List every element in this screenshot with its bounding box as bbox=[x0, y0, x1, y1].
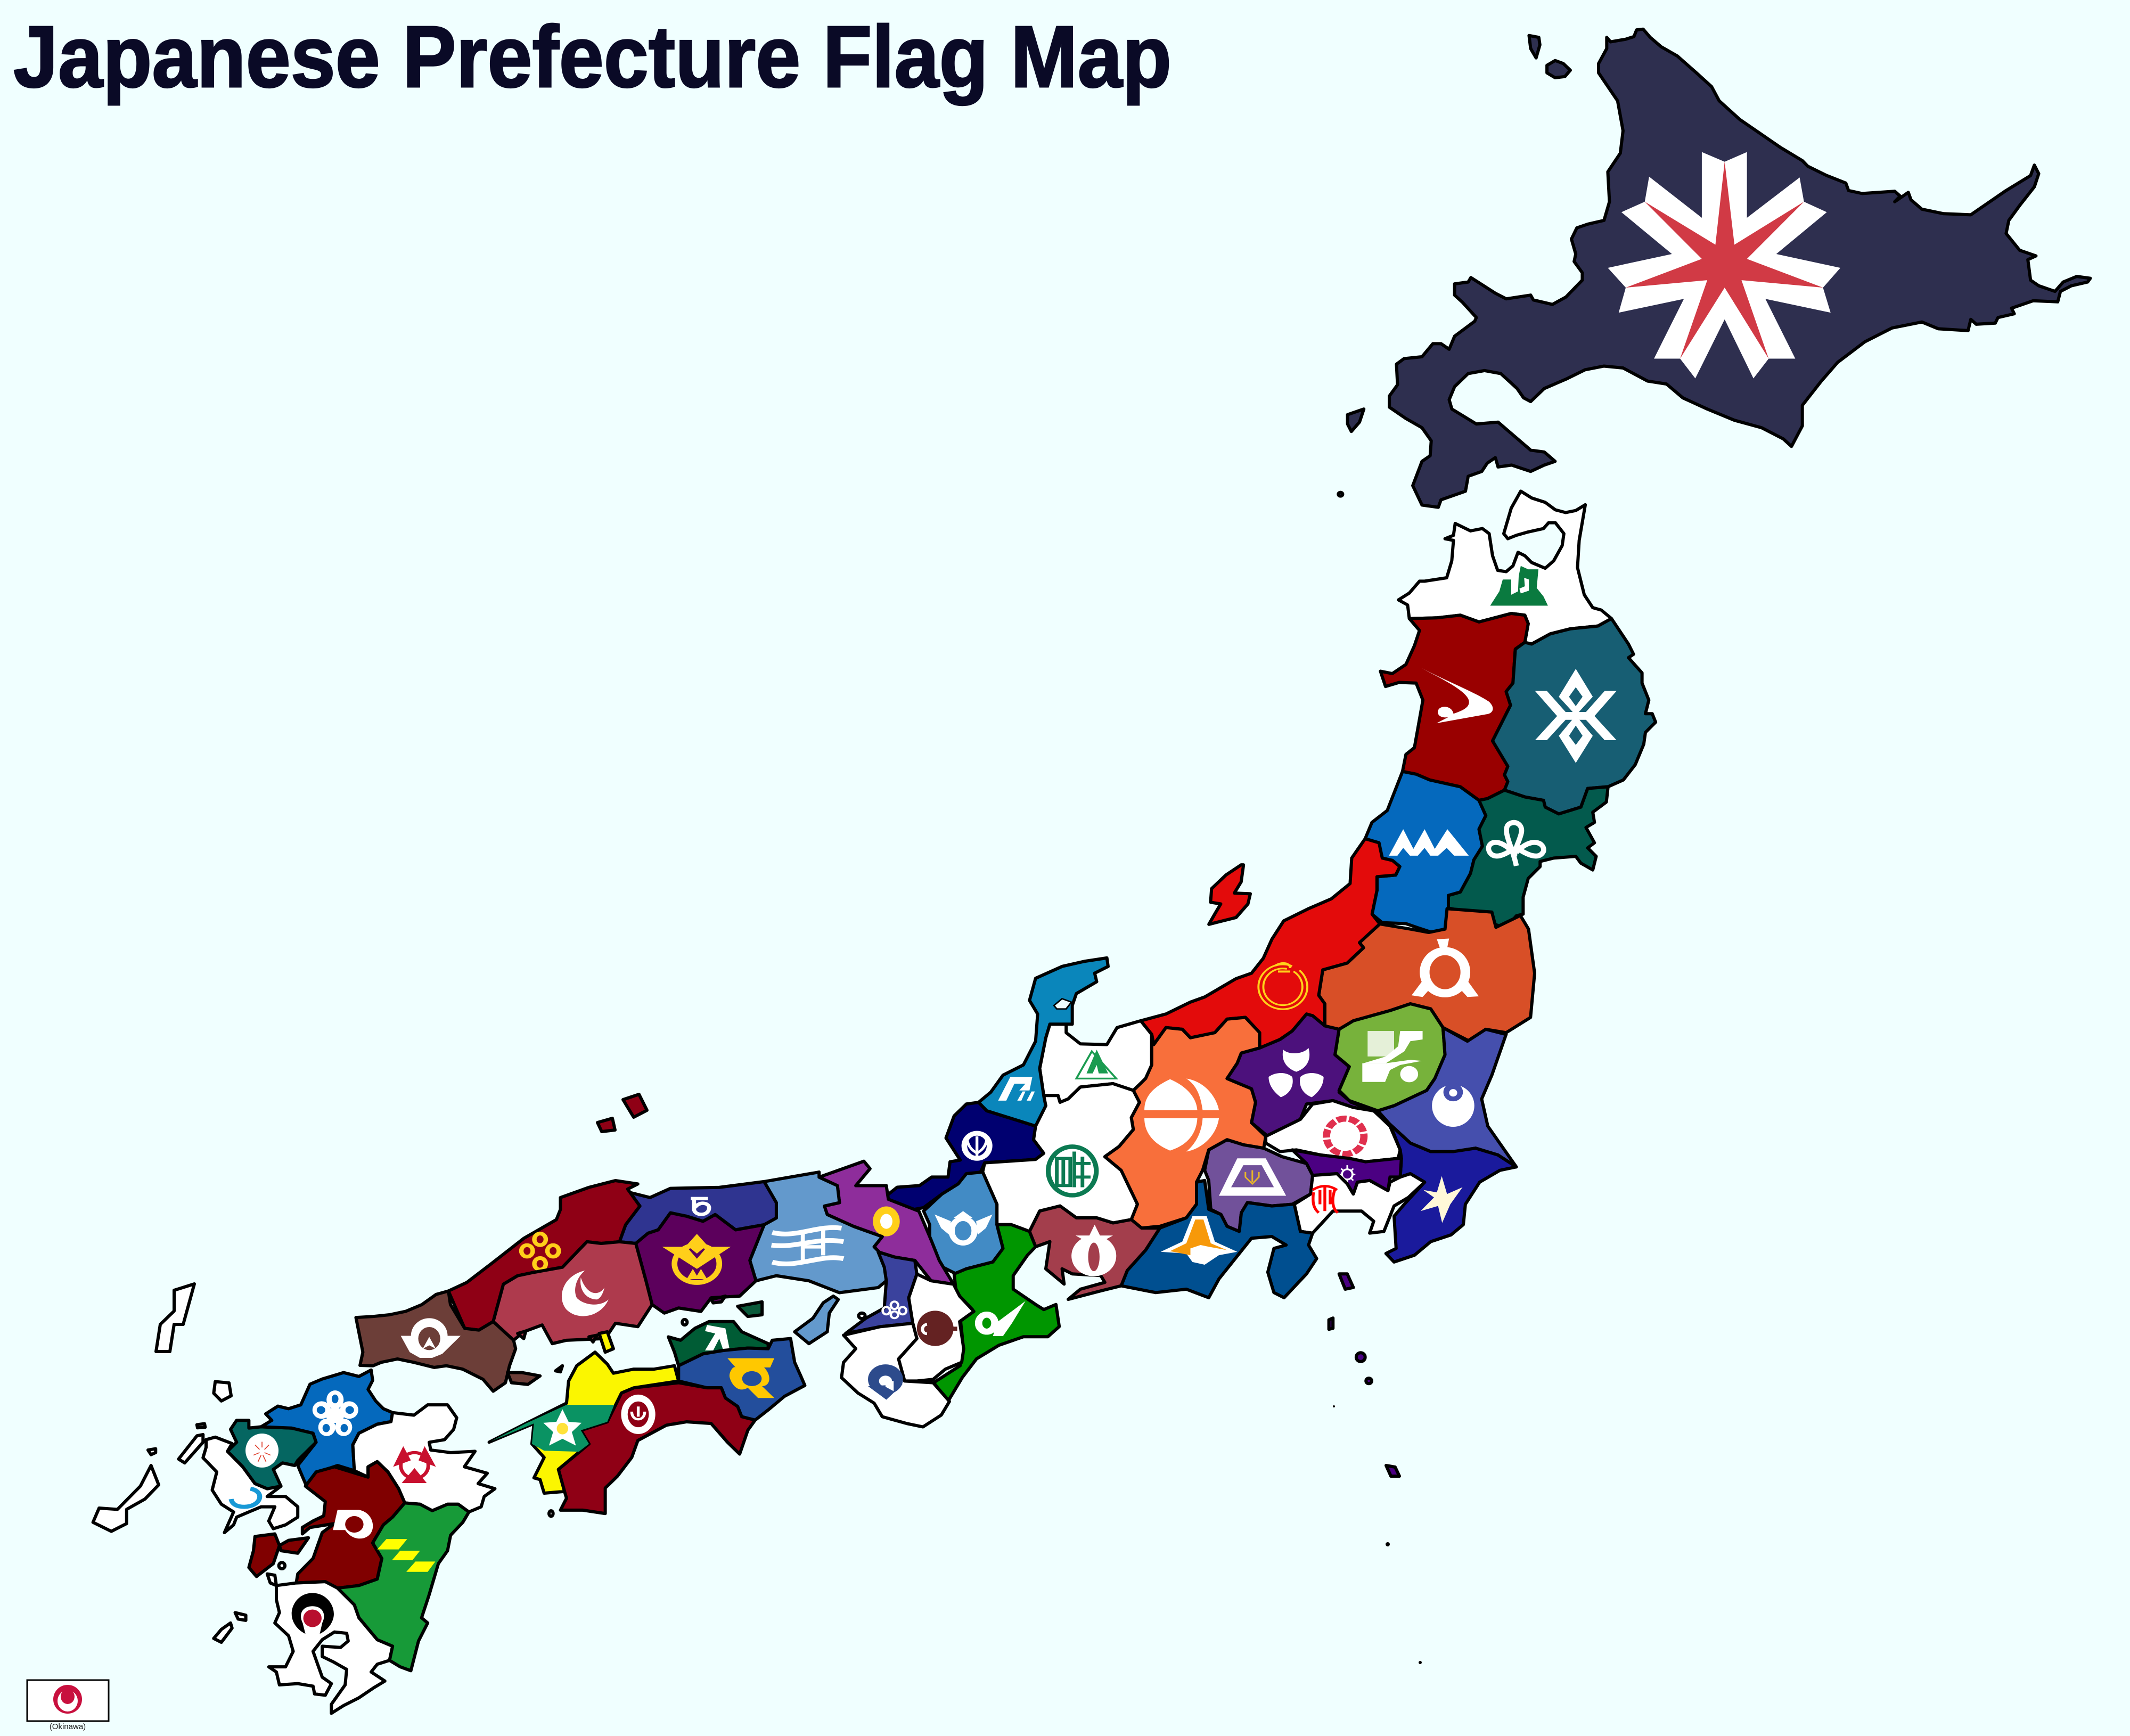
islands: Amakusa bbox=[249, 1534, 308, 1576]
prefecture: Nagano bbox=[1105, 1018, 1266, 1228]
region: Tohoku bbox=[1209, 491, 1656, 933]
prefecture: Fukui and Kyoto coast bbox=[887, 1102, 1044, 1211]
island: Sado bbox=[1209, 865, 1250, 924]
prefecture: Nagasaki bbox=[203, 1437, 298, 1533]
prefecture: Hyogo area bbox=[819, 1161, 954, 1284]
prefecture: Shizuoka bbox=[1121, 1181, 1317, 1298]
prefecture: Kagawa bbox=[668, 1322, 768, 1366]
icon: Okinawa emblem bbox=[53, 1685, 82, 1714]
prefecture: Niigata bbox=[1141, 839, 1400, 1048]
prefecture: Mie bbox=[934, 1225, 1059, 1401]
prefecture: Ehime bbox=[489, 1352, 678, 1493]
prefecture: Yamagata bbox=[1365, 772, 1486, 933]
prefecture: Hyogo south, light blue bbox=[750, 1172, 886, 1293]
prefecture: Okayama bbox=[636, 1213, 764, 1313]
prefecture: Iwate bbox=[1493, 619, 1656, 814]
prefecture: Hokkaido bbox=[1389, 29, 2090, 507]
prefecture: Hiroshima bbox=[493, 1242, 652, 1344]
prefecture: Oita bbox=[353, 1405, 495, 1512]
islands: Oki bbox=[597, 1094, 647, 1132]
prefecture: Akita bbox=[1380, 613, 1528, 800]
region: Kyushu bbox=[93, 1370, 495, 1713]
prefecture: Yamaguchi bbox=[356, 1291, 515, 1391]
prefecture: Shimane bbox=[448, 1181, 640, 1330]
prefecture: Kagoshima bbox=[269, 1582, 392, 1713]
prefecture: Gifu bbox=[982, 1084, 1140, 1231]
prefecture: Gunma bbox=[1227, 1014, 1374, 1136]
prefecture: Chiba bbox=[1386, 1125, 1517, 1262]
prefecture: Yamanashi bbox=[1205, 1140, 1313, 1231]
region: Hokkaido bbox=[1338, 29, 2090, 507]
prefecture: Tokushima bbox=[678, 1339, 805, 1420]
prefecture: Aomori bbox=[1398, 491, 1611, 644]
prefecture: Nara bbox=[898, 1274, 974, 1381]
islands: Rishiri, Rebun, Okushiri bbox=[1338, 36, 1570, 496]
prefecture: Kochi bbox=[559, 1383, 755, 1513]
prefecture: Saga bbox=[227, 1420, 316, 1489]
island: Awaji bbox=[794, 1296, 838, 1344]
prefecture: Ishikawa bbox=[979, 958, 1108, 1126]
inset: Okinawa flag bbox=[27, 1680, 109, 1731]
islands: Seto Inland Sea bbox=[507, 1296, 865, 1516]
title: Japanese Prefecture Flag Map bbox=[13, 8, 1172, 105]
prefecture: Osaka bbox=[846, 1252, 917, 1333]
prefecture: Tottori bbox=[619, 1182, 776, 1243]
islands: Izu bbox=[1329, 1274, 1372, 1383]
region: Kansai, Chugoku and Shikoku bbox=[356, 1161, 974, 1516]
island: Tsushima bbox=[156, 1284, 194, 1352]
prefecture: Kumamoto bbox=[296, 1462, 405, 1588]
prefecture: Miyagi bbox=[1448, 787, 1608, 928]
region: Chubu and Kanto bbox=[887, 839, 1535, 1401]
prefecture: Tochigi bbox=[1335, 1004, 1445, 1111]
prefecture: Toyama bbox=[1039, 1021, 1152, 1102]
prefecture: Miyazaki bbox=[338, 1503, 469, 1671]
islands: Iki, Goto, Hirado, Koshiki bbox=[93, 1382, 285, 1642]
prefecture: Aichi bbox=[1029, 1206, 1160, 1299]
caption: Okinawa: (Okinawa) bbox=[50, 1722, 86, 1731]
prefecture: Shiga emblem area bbox=[923, 1172, 1003, 1274]
prefecture: Tokyo bbox=[1292, 1150, 1402, 1194]
prefecture: Kanagawa bbox=[1295, 1174, 1424, 1233]
prefecture: Ibaraki bbox=[1378, 1028, 1517, 1167]
prefecture: Saitama bbox=[1266, 1101, 1400, 1162]
prefecture: Wakayama bbox=[841, 1323, 949, 1427]
islands: far south bbox=[1333, 1405, 1422, 1664]
prefecture: Fukushima bbox=[1318, 908, 1535, 1041]
prefecture: Fukuoka bbox=[261, 1370, 392, 1484]
